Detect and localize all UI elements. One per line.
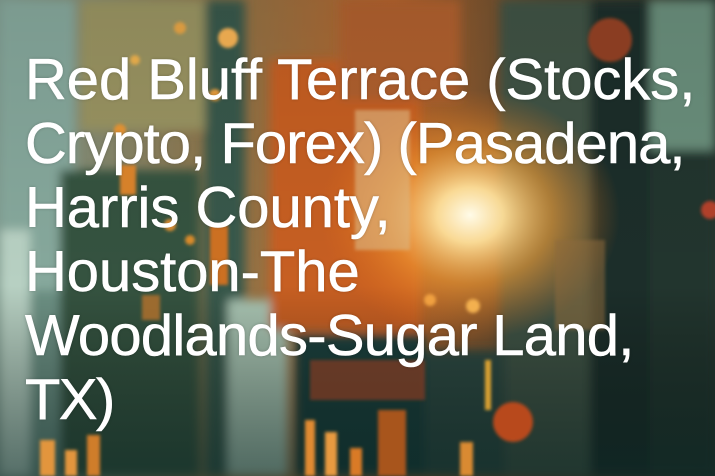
title: Woodlands-Sugar Land, — [25, 304, 634, 368]
title: TX) — [25, 368, 114, 432]
title: Red Bluff Terrace (Stocks, — [25, 48, 695, 112]
title — [24, 48, 695, 432]
title: Harris County, — [25, 176, 391, 240]
bokeh lights — [218, 28, 238, 48]
title: Houston-The — [25, 240, 360, 304]
building panel highlights — [355, 110, 410, 250]
title: Crypto, Forex) (Pasadena, — [25, 112, 685, 176]
